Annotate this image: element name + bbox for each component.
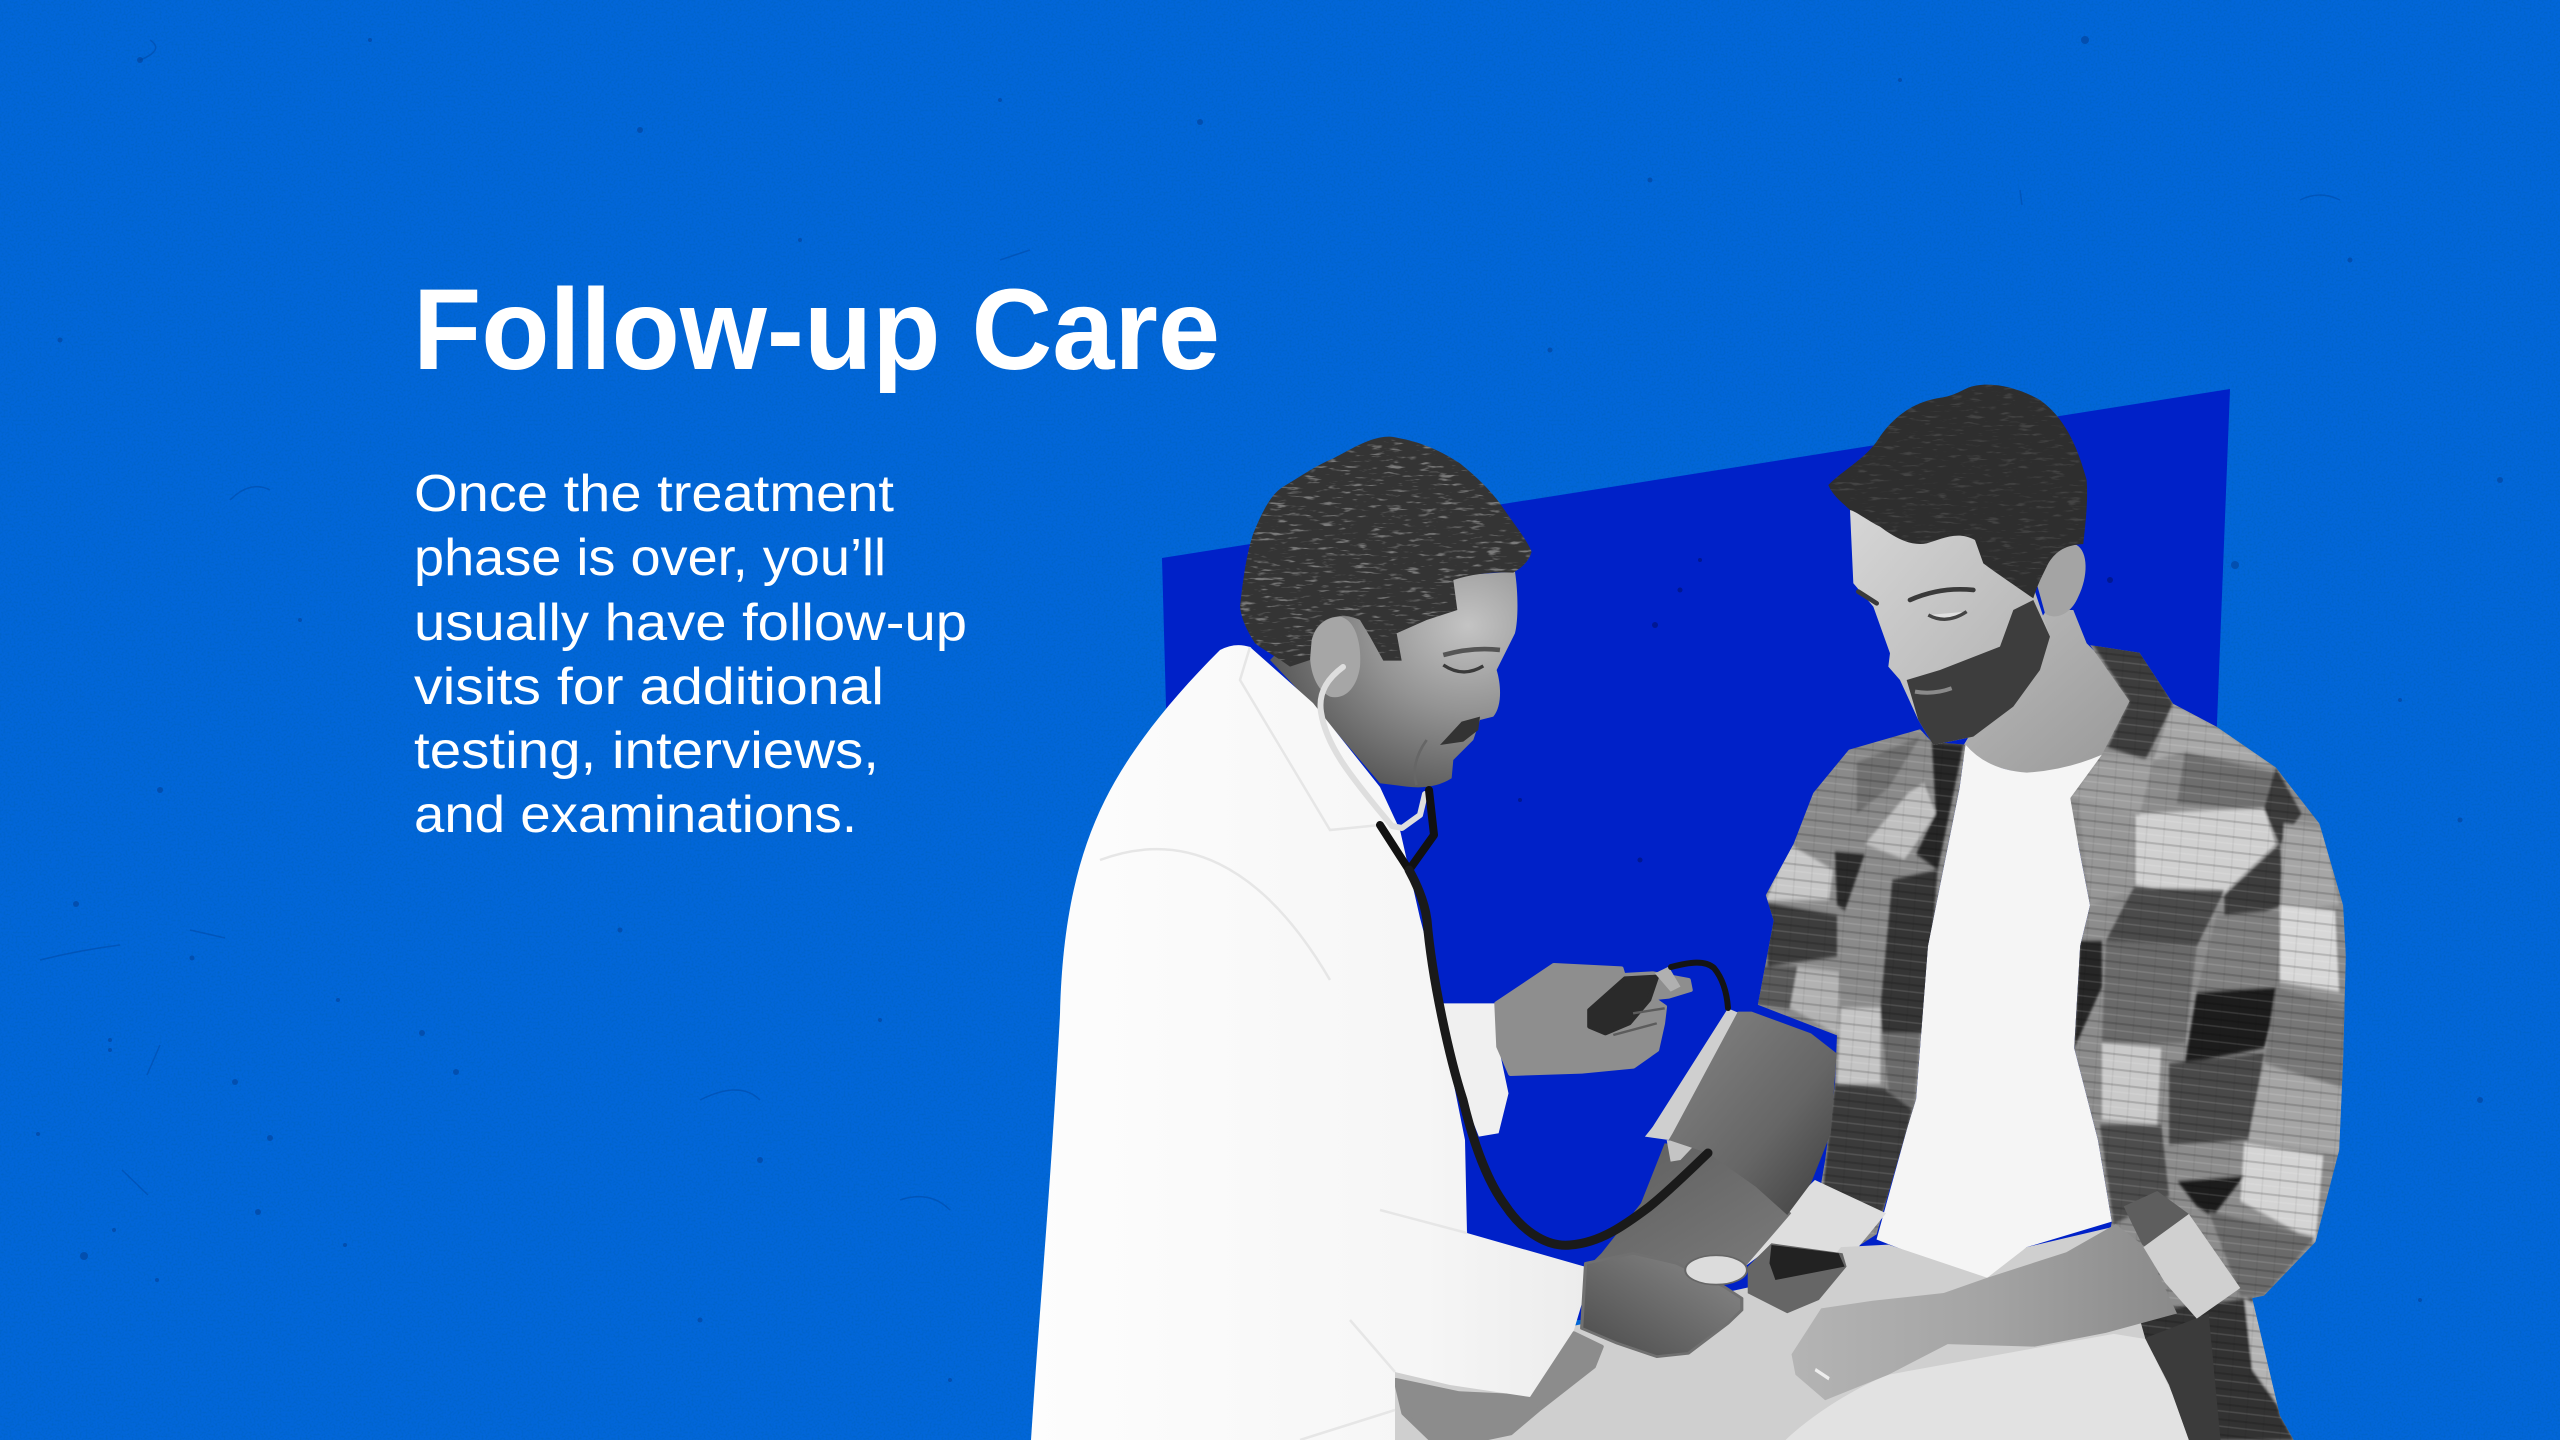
jaw crease [1415,740,1427,785]
arm in cuff [1590,1008,1847,1313]
title: Follow-up Care [413,266,1220,394]
patient torso [1750,640,2375,1440]
patient neck [1957,610,2147,777]
leg filler beneath hands [1380,1287,1815,1440]
shirt tuft at cuff [1667,1140,1696,1162]
chest tube junction [1380,790,1434,870]
trousers upper [1513,1227,2189,1440]
cuff flap edge [1645,1008,1748,1140]
earpiece tube [1320,667,1425,828]
body text: usually have follow-up [414,594,967,652]
shirt left panel and sleeve [1758,729,1966,1246]
brow [1443,649,1500,655]
main black tube [1409,870,1708,1245]
doctor hand holding gauge [1582,1253,1742,1357]
doctor head and coat [1031,437,1747,1440]
upper arm [1590,1143,1791,1268]
body text: phase is over, you’ll [414,529,886,587]
patient forearm and hand [1792,1224,2177,1400]
trousers front thigh [1786,1334,2189,1440]
bulb tube [1671,963,1728,1008]
dark blue backdrop shape [1162,389,2230,1320]
stethoscope [1320,667,1728,1245]
dark knot [1769,1245,1845,1280]
body text: and examinations. [414,786,857,844]
ear [2037,545,2086,616]
blood pressure cuff [1669,1012,1837,1215]
mouth [1915,688,1952,693]
gauge [1685,1255,1747,1285]
brow [1858,589,1973,603]
body text: visits for additional [414,658,884,716]
bulb [1590,977,1657,1033]
face and neck [1270,572,1517,787]
finger creases [1613,1008,1665,1035]
rolled sleeve cuff [2143,1214,2240,1319]
hair highlights [1828,385,2087,598]
wedding ring [1815,1370,1829,1379]
beard [1907,600,2050,745]
paper fibres [40,40,2340,1210]
hair [1828,385,2087,598]
body text: testing, interviews, [414,722,879,780]
far sleeve cuff [1441,1003,1509,1137]
coat folds [1100,647,1467,1440]
face [1850,510,2050,745]
white coat [1031,645,1588,1440]
bulb valve [1655,967,1681,992]
far sleeve cuff and hand holding bulb [1441,965,1690,1137]
shirt hem lower right [2145,1313,2221,1440]
shirt lower band above cuff [2124,1191,2189,1247]
closed eye [1443,665,1483,672]
ear [1310,617,1360,697]
body text [414,465,967,844]
body text: Once the treatment [414,465,895,523]
hand [1497,965,1690,1074]
photo: doctor and patient [1031,385,2375,1440]
backdrop specks [1518,558,2113,1062]
mustache [1440,717,1480,745]
closed eye [1928,612,1967,619]
hair grey strands [1240,437,1532,667]
patient head [1828,385,2087,745]
white t-shirt [1877,745,2112,1283]
doctor lower hand on patient leg [1396,1333,1601,1440]
doctor hair [1240,437,1532,667]
pale undershirt behind arm [1736,1180,1886,1273]
shirt tail [1748,1243,1847,1313]
patient legs and forearm [1513,1191,2240,1440]
blood pressure arm and cuff [1380,1180,1886,1440]
shirt right panel and sleeve [2070,645,2346,1440]
